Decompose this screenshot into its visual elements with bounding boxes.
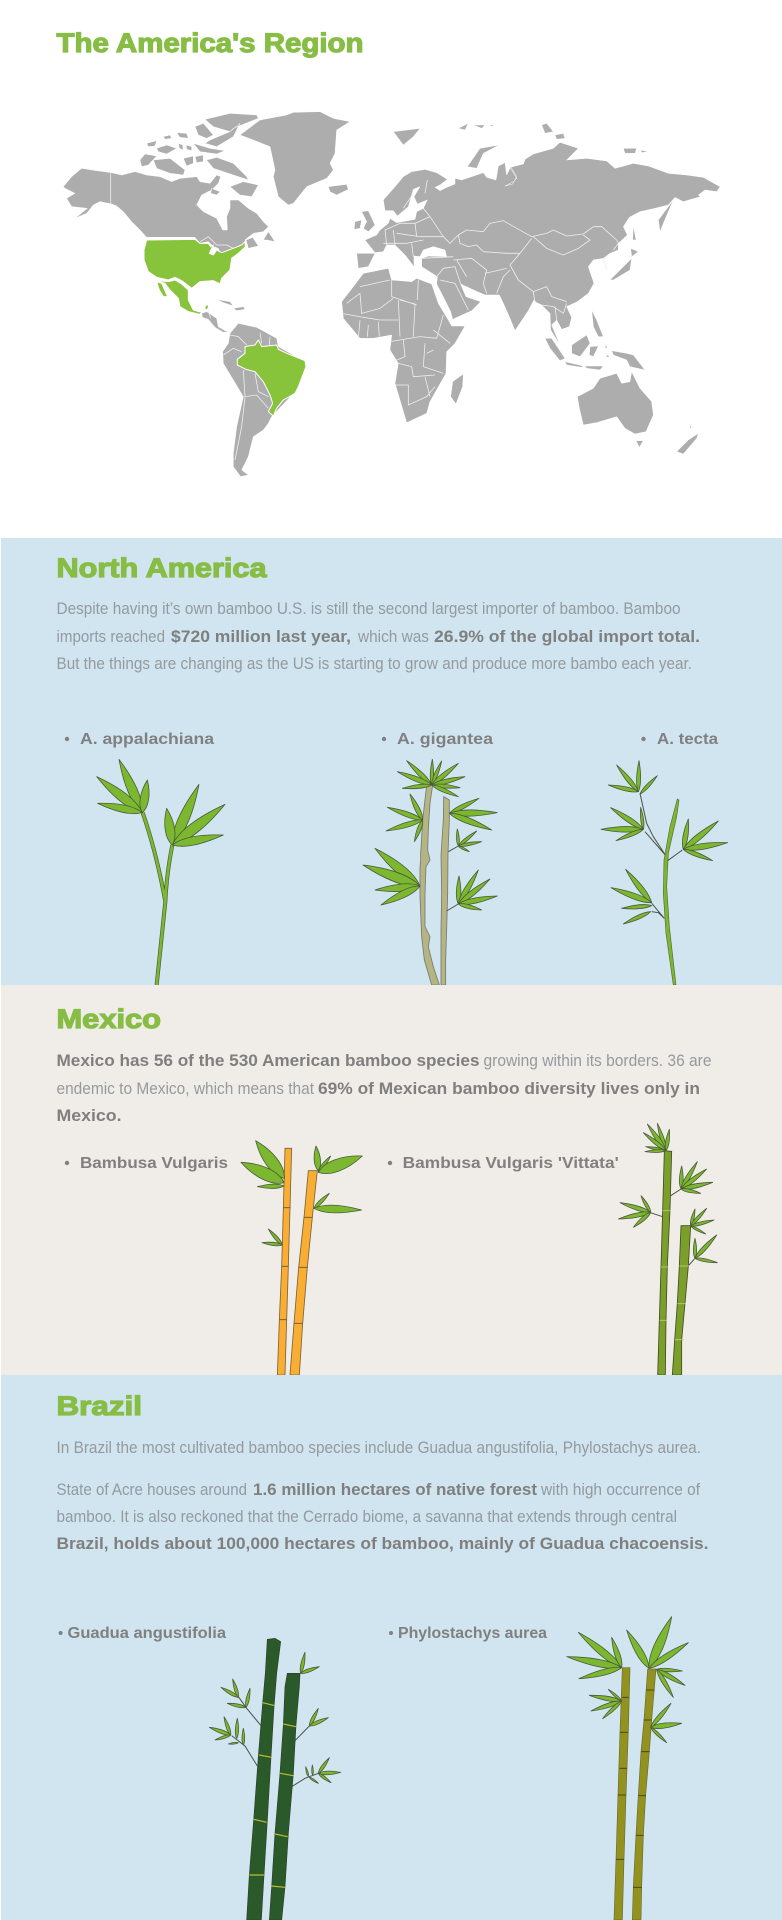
plant: Bambusa Vulgaris Vittata: [618, 1123, 718, 1375]
text block: Mexico: endemic to Mexico, which means that: [56, 1079, 314, 1098]
plant: Guadua angustifolia: [209, 1638, 341, 1920]
Indonesia, Philippines, Japan and northern islands: [393, 123, 673, 370]
Eurasia: [365, 142, 720, 345]
text block: Mexico: Mexico has 56 of the 530 American bamboo species: [56, 1052, 480, 1070]
panel: North America: [1, 538, 782, 985]
label: Bambusa Vulgaris: Bambusa Vulgaris: [80, 1155, 228, 1172]
panel: Mexico: [1, 985, 782, 1375]
Iberia, UK and Ireland: [354, 211, 375, 268]
plant: A. appalachiana: [94, 757, 228, 985]
text block: Brazil cultivated species: In Brazil the most cultivated bamboo species include Guadua angustifolia, Phylostachys aurea.: [56, 1438, 701, 1457]
text block: Brazil native forest: State of Acre houses around: [56, 1480, 247, 1499]
text block: Mexico: [56, 1051, 712, 1125]
map: europe, africa, asia, oceania: [342, 123, 720, 454]
heading: North America: North America: [56, 553, 267, 583]
text block: Mexico: growing within its borders. 36 are: [484, 1051, 712, 1070]
Australia, Tasmania, New Zealand: [577, 372, 698, 454]
Canada and Alaska: [63, 168, 268, 255]
text block: North America: [56, 599, 700, 673]
text block: Brazil native forest: Brazil, holds about 100,000 hectares of bamboo, mainly of Guadua chacoensis.: [56, 1535, 708, 1553]
title: The America's Region: [56, 28, 364, 58]
label: A. gigantea: A. gigantea: [397, 731, 493, 748]
text block: North America: 26.9% of the global import total.: [434, 628, 700, 646]
plant: A. tecta: [601, 761, 728, 985]
label: Bambusa Vulgaris 'Vittata': Bambusa Vulgaris 'Vittata': [403, 1155, 619, 1172]
Brazil: [237, 340, 306, 416]
borders: [383, 180, 618, 320]
label: A. tecta: A. tecta: [657, 731, 718, 748]
text block: Brazil native forest: with high occurrence of: [540, 1480, 700, 1499]
Mexico: [157, 280, 209, 314]
text block: North America: $720 million last year,: [171, 628, 351, 646]
text block: Brazil native forest: bamboo. It is also reckoned that the Cerrado biome, a savanna that extends through central: [56, 1507, 677, 1526]
label: A. appalachiana: A. appalachiana: [80, 731, 214, 748]
plant: Phylostachys aurea: [566, 1615, 690, 1920]
South America: [223, 323, 305, 477]
Africa: [342, 268, 465, 423]
text block: North America: Despite having it’s own bamboo U.S. is still the second largest importer of bamboo. Bamboo: [56, 599, 680, 618]
Greenland and Iceland: [240, 112, 350, 205]
heading: Brazil: Brazil: [56, 1391, 142, 1421]
Madagascar: [451, 374, 463, 404]
text block: North America: imports reached: [56, 627, 165, 646]
USA: [144, 239, 245, 288]
panel: Brazil: [1, 1375, 782, 1920]
text block: Mexico: Mexico.: [56, 1107, 122, 1125]
Central America and Caribbean: [202, 299, 245, 332]
map: americas and greenland: [63, 112, 350, 477]
text block: North America: which was: [357, 627, 429, 646]
heading: Mexico: Mexico: [56, 1004, 161, 1034]
plant: A. gigantea: [361, 759, 498, 985]
text block: North America: But the things are changing as the US is starting to grow and produce more bambo each year.: [56, 654, 692, 673]
text block: Mexico: 69% of Mexican bamboo diversity lives only in: [318, 1080, 700, 1098]
text block: Brazil native forest: 1.6 million hectares of native forest: [253, 1481, 538, 1499]
world map: [63, 112, 720, 477]
label: Guadua angustifolia: Guadua angustifolia: [68, 1625, 226, 1642]
label: Phylostachys aurea: Phylostachys aurea: [398, 1625, 547, 1642]
plant: Bambusa Vulgaris: [238, 1137, 364, 1375]
text block: Brazil native forest: [56, 1480, 708, 1553]
arctic islands: [140, 113, 275, 248]
